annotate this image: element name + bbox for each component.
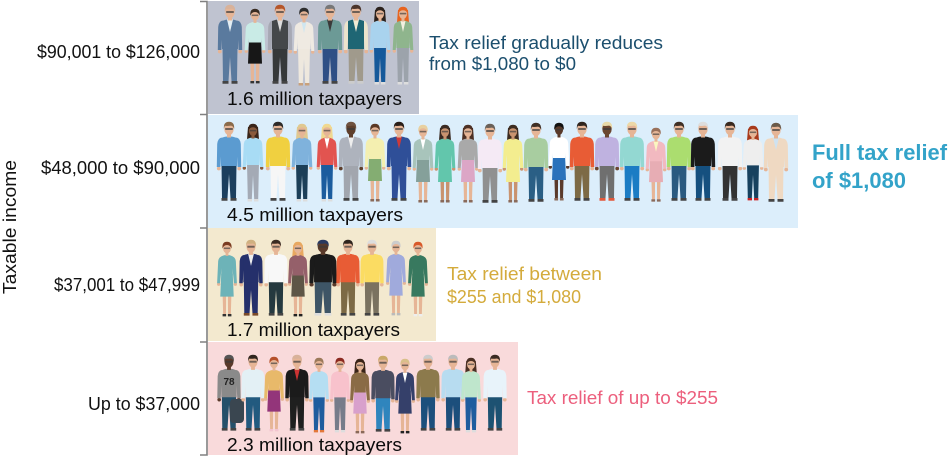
income range labels: $37,001 to $47,999: [54, 274, 200, 295]
shirt number: 78: [223, 377, 235, 388]
icon: backpack: [230, 399, 244, 423]
count: 1.6 million taxpayers: 1.6 million taxpayers: [227, 88, 402, 109]
people row: 9 taxpayers: [217, 240, 428, 316]
callout: full tax relief: [812, 140, 948, 193]
callout: between $255 and $1,080: $255 and $1,080: [447, 286, 581, 307]
income range labels: $90,001 to $126,000: [37, 41, 200, 62]
callout: up to $255: Tax relief of up to $255: [527, 387, 718, 408]
callout: gradual reduction: [429, 32, 663, 74]
count: 2.3 million taxpayers: 2.3 million taxpayers: [227, 434, 402, 455]
panel: Up to $37,000: [208, 342, 518, 455]
panel: $37,001 to $47,999: [208, 228, 436, 341]
callout: between $255 and $1,080: Tax relief between: [447, 263, 602, 284]
panel: $90,001 to $126,000: [208, 1, 419, 114]
callout: gradual reduction: Tax relief gradually reduces: [429, 32, 663, 53]
people row: 13 taxpayers: [217, 355, 507, 433]
count: 4.5 million taxpayers: 4.5 million taxpayers: [227, 204, 403, 225]
callout: full tax relief: of $1,080: [812, 168, 906, 193]
income range labels: [37, 41, 200, 414]
callout: full tax relief: Full tax relief: [812, 140, 948, 165]
income range labels: $48,000 to $90,000: [41, 157, 200, 178]
count: 1.7 million taxpayers: 1.7 million taxpayers: [227, 319, 400, 340]
people row: 24 taxpayers: [217, 122, 788, 203]
callout: gradual reduction: from $1,080 to $0: [429, 53, 576, 74]
people row: 8 taxpayers: [218, 5, 413, 86]
panel: $48,000 to $90,000: [208, 115, 798, 228]
income range labels: Up to $37,000: [88, 393, 200, 414]
callout: between $255 and $1,080: [447, 263, 602, 307]
income axis bracket: [200, 2, 207, 455]
